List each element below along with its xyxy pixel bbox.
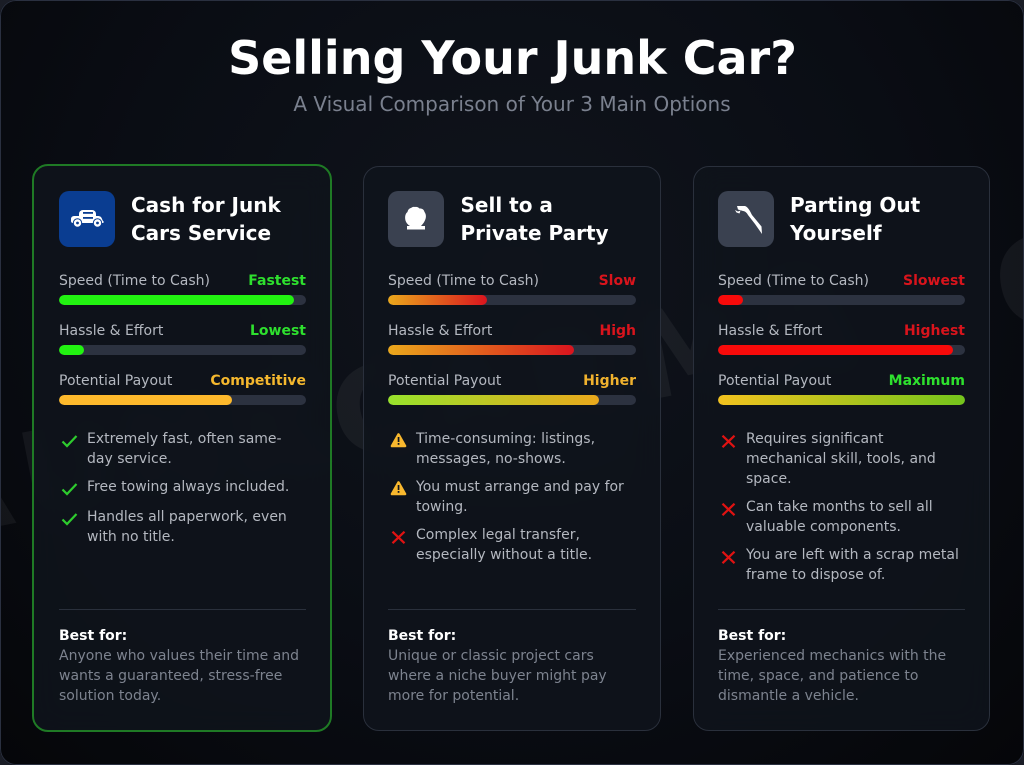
metric: hassle	[718, 323, 965, 339]
metric: payout: Maximum	[889, 373, 965, 389]
pro: paperwork: Handles all paperwork, even with no title.	[87, 509, 287, 545]
panel: parting out yourself	[693, 166, 990, 731]
metric: payout: Potential Payout	[59, 373, 172, 389]
best for: Best for:	[718, 628, 786, 644]
metric: hassle: Lowest	[250, 323, 306, 339]
heading: Private Party	[460, 221, 609, 245]
metric: payout: Potential Payout	[388, 373, 501, 389]
con: months: Can take months to sell all valuable components.	[746, 499, 933, 535]
metric: speed: Speed (Time to Cash)	[59, 273, 210, 289]
metric: payout	[388, 373, 636, 389]
metric: payout	[59, 373, 306, 389]
metric: speed: Slow	[599, 273, 636, 289]
metric: speed: Speed (Time to Cash)	[388, 273, 539, 289]
bar: payout	[388, 395, 636, 405]
metric: hassle	[388, 323, 636, 339]
heading	[131, 193, 282, 245]
metric: hassle	[59, 323, 306, 339]
heading: Parting Out	[790, 193, 920, 217]
best for: Best for:	[59, 628, 127, 644]
pro: towing: Free towing always included.	[87, 479, 289, 495]
metric: payout: Competitive	[210, 373, 306, 389]
best for: Experienced mechanics with the time, space, and patience to dismantle a vehicle.	[718, 648, 946, 704]
con: legal: Complex legal transfer, especially without a title.	[416, 527, 592, 563]
best for: Unique or classic project cars where a niche buyer might pay more for potential.	[388, 648, 607, 704]
bar: speed	[718, 295, 965, 305]
text: UNK	[7, 353, 343, 549]
metric: hassle: High	[599, 323, 636, 339]
panel: cash for junk cars service	[32, 164, 332, 732]
heading: Cash for Junk	[131, 193, 281, 217]
icon: car	[59, 191, 115, 247]
heading	[460, 193, 609, 245]
bar: payout	[59, 395, 306, 405]
subtitle: A Visual Comparison of Your 3 Main Options	[293, 92, 731, 116]
heading: Cars Service	[131, 221, 271, 245]
bar: speed	[388, 295, 636, 305]
metric: speed: Slowest	[903, 273, 965, 289]
bar: hassle	[59, 345, 306, 355]
text: CAR	[319, 295, 638, 488]
bar: payout	[718, 395, 965, 405]
heading: Sell to a	[460, 193, 553, 217]
icon: wrench	[718, 191, 774, 247]
metric: payout	[718, 373, 965, 389]
bar: hassle	[718, 345, 965, 355]
icon: handshake	[388, 191, 444, 247]
title: Selling Your Junk Car?	[228, 31, 797, 85]
best for: Anyone who values their time and wants a guaranteed, stress-free solution today.	[59, 648, 299, 704]
bar: speed	[59, 295, 306, 305]
metric: speed: Fastest	[248, 273, 306, 289]
pro: fast: Extremely fast, often same-day service.	[87, 431, 282, 467]
metric: speed	[718, 273, 965, 289]
text: MA	[619, 250, 869, 430]
warning: time: Time-consuming: listings, messages, no-shows.	[416, 431, 595, 467]
bar: hassle	[388, 345, 636, 355]
metric: speed	[388, 273, 636, 289]
metric: speed: Speed (Time to Cash)	[718, 273, 869, 289]
metric: hassle: Highest	[904, 323, 965, 339]
metric: hassle: Hassle & Effort	[59, 323, 163, 339]
metric: speed	[59, 273, 306, 289]
warning: towing: You must arrange and pay for towing.	[416, 479, 624, 515]
metric: hassle: Hassle & Effort	[718, 323, 822, 339]
best for: Best for:	[388, 628, 456, 644]
heading	[790, 193, 920, 245]
con: scrap: You are left with a scrap metal frame to dispose of.	[746, 547, 959, 583]
panel: sell to a private party	[363, 166, 661, 731]
metric: hassle: Hassle & Effort	[388, 323, 492, 339]
metric: payout: Potential Payout	[718, 373, 831, 389]
metric: payout: Higher	[583, 373, 636, 389]
heading: Yourself	[790, 221, 882, 245]
con: skill: Requires significant mechanical skill, tools, and space.	[746, 431, 936, 487]
